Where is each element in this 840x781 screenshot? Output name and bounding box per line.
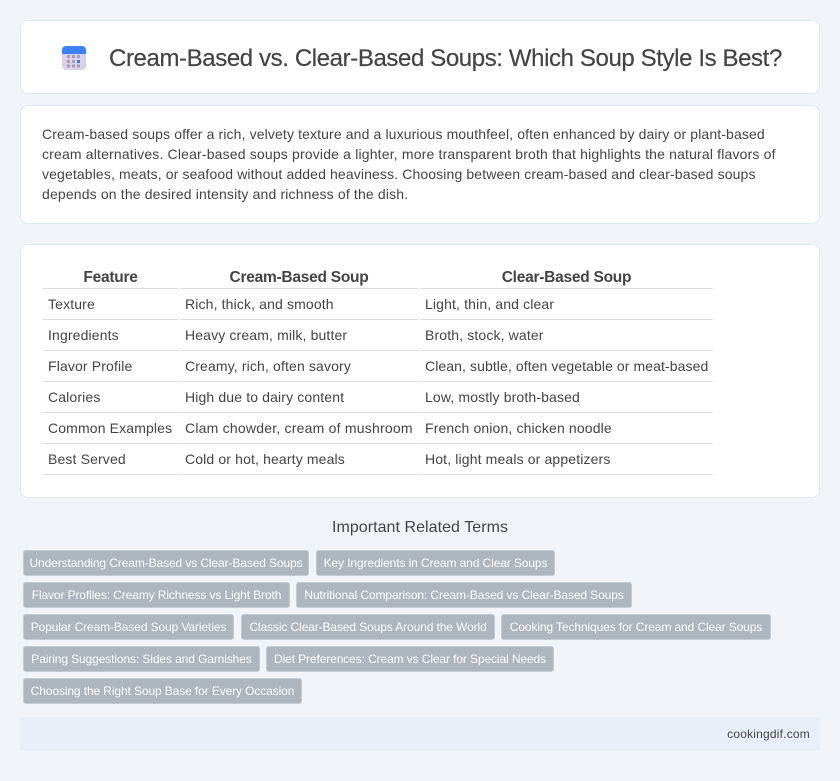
comparison table: Texture [48, 296, 95, 312]
comparison table: Broth, stock, water [425, 327, 544, 343]
related terms tags: Popular Cream-Based Soup Varieties [31, 620, 226, 634]
comparison table [43, 269, 713, 475]
comparison table: Light, thin, and clear [425, 296, 554, 312]
comparison table: High due to dairy content [185, 389, 344, 405]
intro text: depends on the desired intensity and richness of the dish. [42, 186, 408, 202]
header card [20, 20, 820, 94]
comparison table: Cold or hot, hearty meals [185, 451, 345, 467]
intro card [20, 105, 820, 224]
related terms tags: Choosing the Right Soup Base for Every Occasion [31, 684, 294, 698]
comparison table: Common Examples [48, 420, 172, 436]
related terms tags: Pairing Suggestions: Sides and Garnishes [31, 652, 252, 666]
related terms tags: Nutritional Comparison: Cream-Based vs Clear-Based Soups [304, 588, 624, 602]
related terms tags: Key Ingredients in Cream and Clear Soups [324, 556, 547, 570]
title: Cream-Based vs. Clear-Based Soups: Which Soup Style Is Best? [109, 45, 782, 72]
comparison table: Heavy cream, milk, butter [185, 327, 347, 343]
related terms heading: Important Related Terms [332, 519, 508, 536]
related terms tags: Flavor Profiles: Creamy Richness vs Light Broth [32, 588, 281, 602]
comparison table: Cream-Based Soup [230, 269, 368, 286]
icon: calendar [62, 46, 86, 70]
comparison table: French onion, chicken noodle [425, 420, 612, 436]
comparison table: Clean, subtle, often vegetable or meat-based [425, 358, 708, 374]
comparison table: Flavor Profile [48, 358, 132, 374]
comparison table: Clam chowder, cream of mushroom [185, 420, 413, 436]
table card [20, 244, 820, 498]
intro text: cream alternatives. Clear-based soups provide a lighter, more transparent broth that highlights the natural flavors of [42, 146, 776, 162]
comparison table: Creamy, rich, often savory [185, 358, 351, 374]
related terms tags: Classic Clear-Based Soups Around the World [249, 620, 487, 634]
footer bar [20, 717, 820, 751]
comparison table: Best Served [48, 451, 126, 467]
related terms tags: Diet Preferences: Cream vs Clear for Special Needs [274, 652, 546, 666]
footer source: cookingdif.com [727, 727, 810, 741]
related terms tags: Cooking Techniques for Cream and Clear Soups [510, 620, 762, 634]
comparison table: Ingredients [48, 327, 119, 343]
comparison table: Low, mostly broth-based [425, 389, 580, 405]
comparison table: Feature [83, 269, 138, 286]
comparison table: Calories [48, 389, 100, 405]
intro text: Cream-based soups offer a rich, velvety texture and a luxurious mouthfeel, often enhanced by dairy or plant-based [42, 126, 765, 142]
comparison table: Rich, thick, and smooth [185, 296, 334, 312]
comparison table: Clear-Based Soup [502, 269, 631, 286]
intro text [42, 126, 776, 202]
intro text: vegetables, meats, or seafood without added heaviness. Choosing between cream-based and clear-based soups [42, 166, 756, 182]
related terms tags [23, 550, 771, 704]
comparison table: Hot, light meals or appetizers [425, 451, 611, 467]
related terms tags: Understanding Cream-Based vs Clear-Based Soups [29, 556, 303, 570]
